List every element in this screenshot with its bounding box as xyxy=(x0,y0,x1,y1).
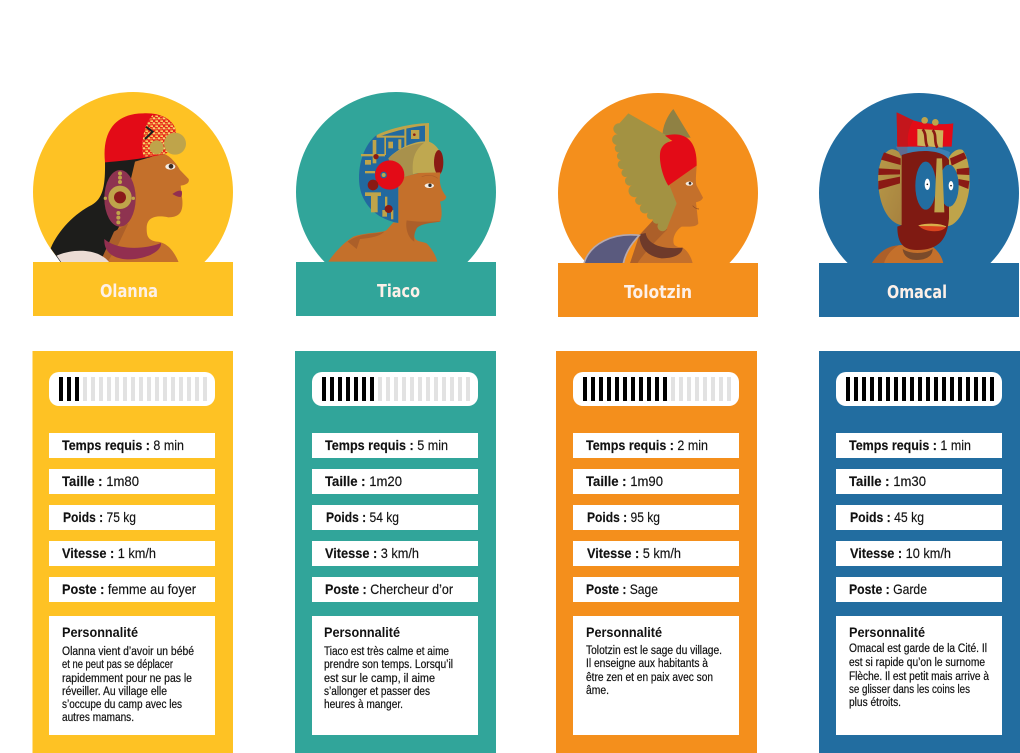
row: taille xyxy=(49,469,215,494)
row: vitesse xyxy=(312,541,478,566)
personality box: Omacal xyxy=(836,616,1002,735)
row: poids xyxy=(573,505,739,530)
row: poste xyxy=(49,577,215,602)
header: Tolotzin xyxy=(558,93,758,317)
portrait: Omacal xyxy=(872,112,970,264)
row: poids xyxy=(836,505,1002,530)
personality box: Tolotzin xyxy=(573,616,739,735)
row: poids: Poids : 54 kg xyxy=(326,509,399,525)
header: Tiaco xyxy=(296,92,496,316)
row: temps requis xyxy=(49,433,215,458)
panel: Tiaco stats xyxy=(295,351,496,753)
progress bar: Omacal xyxy=(836,372,1002,406)
row: temps requis xyxy=(573,433,739,458)
personality box: Omacal: Omacal est garde de la Cité. Il xyxy=(849,643,987,655)
personality box: Tolotzin: âme. xyxy=(586,685,609,697)
row: poste: Poste : Garde xyxy=(849,581,927,597)
row: poids xyxy=(49,505,215,530)
header: Omacal xyxy=(819,93,1019,317)
row: vitesse xyxy=(49,541,215,566)
progress bar: Olanna xyxy=(49,372,215,406)
personality box: Olanna: Olanna vient d’avoir un bébé xyxy=(62,646,194,658)
row: poste: Poste : femme au foyer xyxy=(62,581,196,597)
row: taille: Taille : 1m20 xyxy=(325,473,402,489)
name banner: Omacal xyxy=(819,263,1019,317)
personality box: Olanna: rapidemment pour ne pas le xyxy=(62,673,192,685)
personality box: Omacal: plus étroits. xyxy=(849,697,901,709)
personality box: Tiaco: est sur le camp, il aime xyxy=(324,673,435,685)
row: taille xyxy=(573,469,739,494)
row: vitesse: Vitesse : 10 km/h xyxy=(850,545,951,561)
personality box: Omacal: Flèche. Il est petit mais arrive à xyxy=(849,671,990,683)
personality box: Tiaco: s’allonger et passer des xyxy=(324,686,430,698)
portrait circle: Tolotzin xyxy=(558,93,758,293)
row: poids xyxy=(312,505,478,530)
row: poste xyxy=(836,577,1002,602)
row: poste xyxy=(312,577,478,602)
row: temps requis xyxy=(312,433,478,458)
row: poste: Poste : Sage xyxy=(586,581,658,597)
row: vitesse: Vitesse : 5 km/h xyxy=(587,545,681,561)
portrait circle: Omacal xyxy=(819,93,1019,293)
name banner: Olanna xyxy=(33,262,233,316)
name: Olanna: Olanna xyxy=(100,281,158,302)
row: poste xyxy=(573,577,739,602)
row: poids: Poids : 75 kg xyxy=(63,509,136,525)
row: poste: Poste : Chercheur d’or xyxy=(325,581,453,597)
name banner: Tolotzin xyxy=(558,263,758,317)
portrait: Tolotzin xyxy=(584,109,703,263)
row: poids: Poids : 95 kg xyxy=(587,509,660,525)
row: taille xyxy=(836,469,1002,494)
personality box: Omacal: est si rapide qu’on le surnome xyxy=(849,657,985,669)
header: Olanna xyxy=(33,92,233,316)
row: poids: Poids : 45 kg xyxy=(850,509,924,525)
personality box: Olanna: réveiller. Au village elle xyxy=(62,686,167,698)
personality box: Olanna: Personnalité xyxy=(62,624,138,640)
personality box: Tiaco: prendre son temps. Lorsqu’il xyxy=(324,659,453,671)
portrait: Olanna xyxy=(51,113,189,262)
personality box: Olanna xyxy=(49,616,215,735)
portrait circle: Olanna xyxy=(33,92,233,292)
name: Tolotzin: Tolotzin xyxy=(624,282,692,303)
row: taille: Taille : 1m30 xyxy=(849,473,926,489)
panel: Tolotzin stats xyxy=(556,351,757,753)
row: temps requis: Temps requis : 5 min xyxy=(325,437,448,453)
progress bar: Tiaco xyxy=(312,372,478,406)
progress bar: Tolotzin xyxy=(573,372,739,406)
name: Tiaco: Tiaco xyxy=(377,281,420,302)
personality box: Olanna: autres mamans. xyxy=(62,712,134,724)
personality box: Omacal: se glisser dans les coins les xyxy=(849,684,970,696)
name: Omacal: Omacal xyxy=(887,282,947,303)
personality box: Tiaco xyxy=(312,616,478,735)
row: vitesse xyxy=(836,541,1002,566)
row: vitesse: Vitesse : 1 km/h xyxy=(62,545,156,561)
personality box: Tolotzin: Il enseigne aux habitants à xyxy=(586,658,709,670)
personality box: Omacal: Personnalité xyxy=(849,624,925,640)
red cap xyxy=(105,113,176,162)
row: temps requis: Temps requis : 1 min xyxy=(849,437,971,453)
personality box: Tiaco: Tiaco est très calme et aime xyxy=(324,646,449,658)
personality box: Tiaco: Personnalité xyxy=(324,624,400,640)
panel: Omacal stats xyxy=(819,351,1020,753)
personality box: Olanna: s’occupe du camp avec les xyxy=(62,699,182,711)
name banner: Tiaco xyxy=(296,262,496,316)
portrait: Tiaco xyxy=(328,123,446,262)
panel: Olanna stats xyxy=(32,351,233,753)
row: temps requis: Temps requis : 2 min xyxy=(586,437,708,453)
personality box: Tolotzin: être zen et en paix avec son xyxy=(586,672,713,684)
personality box: Tolotzin: Personnalité xyxy=(586,624,662,640)
row: taille: Taille : 1m80 xyxy=(62,473,139,489)
row: taille xyxy=(312,469,478,494)
ear ornament xyxy=(104,170,136,227)
personality box: Tiaco: heures à manger. xyxy=(324,699,403,711)
personality box: Olanna: et ne peut pas se déplacer xyxy=(62,659,173,671)
row: taille: Taille : 1m90 xyxy=(586,473,663,489)
row: vitesse xyxy=(573,541,739,566)
row: temps requis: Temps requis : 8 min xyxy=(62,437,184,453)
row: vitesse: Vitesse : 3 km/h xyxy=(325,545,419,561)
portrait circle: Tiaco xyxy=(296,92,496,292)
personality box: Tolotzin: Tolotzin est le sage du village. xyxy=(586,645,722,657)
row: temps requis xyxy=(836,433,1002,458)
